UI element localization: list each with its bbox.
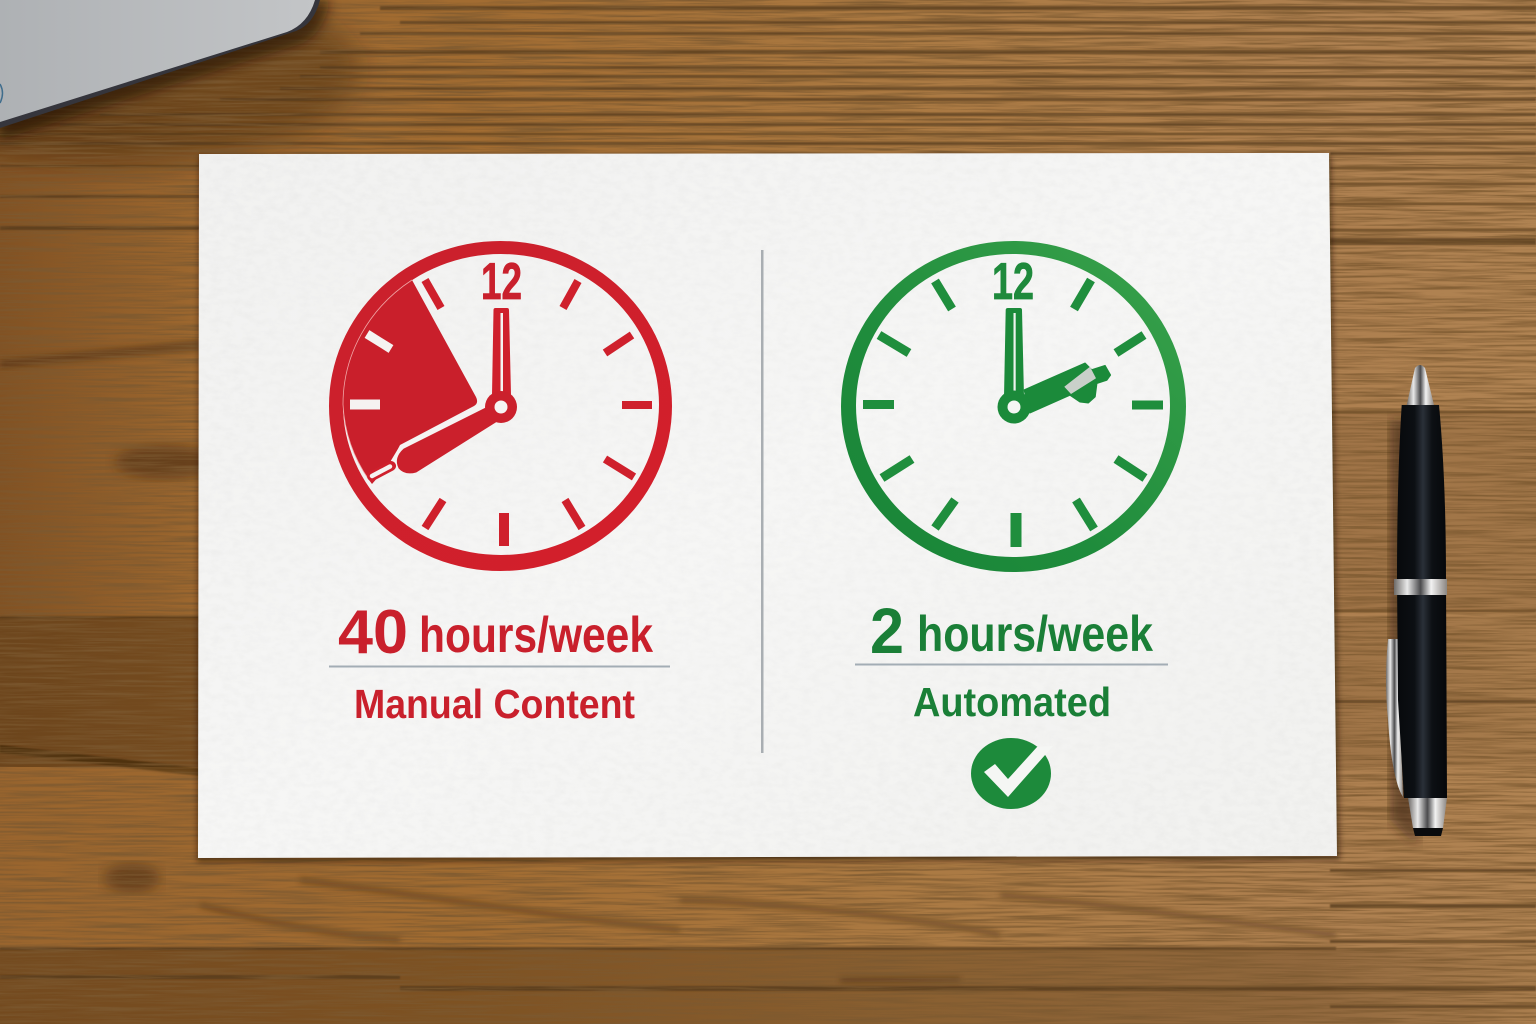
icon: green check badge — [971, 738, 1053, 809]
rule under red metric — [329, 666, 670, 668]
center divider — [761, 250, 764, 753]
shaded forty hour wedge — [343, 280, 477, 484]
label: automated: Automated — [913, 679, 1111, 725]
paper sheet — [190, 150, 1350, 862]
minute hand — [1004, 308, 1024, 397]
pen nib — [1407, 365, 1434, 405]
pen barrel — [1397, 405, 1447, 798]
pen end cap — [1408, 798, 1447, 828]
metric: 2 hours per week: 2 — [870, 595, 904, 667]
panel: automated clock — [841, 241, 1186, 572]
pen clip — [1386, 639, 1403, 797]
number 12: 12 — [992, 253, 1034, 311]
clock ring red — [329, 241, 672, 571]
pen — [1386, 365, 1447, 840]
metric: 40 hours per week: 40 — [338, 598, 408, 667]
panel: manual content clock — [329, 241, 672, 571]
laptop corner — [0, 0, 330, 140]
rule under green metric — [855, 664, 1168, 666]
metric: 2 hours per week — [870, 595, 1153, 667]
wedge hairline — [343, 280, 412, 480]
hour hand with white gap — [372, 405, 497, 476]
pen ring — [1394, 579, 1447, 595]
clock pivot — [998, 390, 1030, 424]
metric: 40 hours per week — [338, 598, 653, 667]
clock ring green — [841, 241, 1186, 572]
white tick marks on wedge — [350, 334, 391, 404]
label: manual content: Manual Content — [354, 681, 635, 727]
red tick marks — [425, 280, 652, 546]
metric: 2 hours per week: hours/week — [917, 606, 1153, 662]
green tick marks — [863, 280, 1163, 547]
hour hand — [1024, 363, 1110, 413]
metric: 40 hours per week: hours/week — [419, 607, 653, 663]
number 12: 12 — [481, 253, 522, 311]
clock pivot — [485, 391, 517, 423]
minute hand — [492, 308, 511, 395]
